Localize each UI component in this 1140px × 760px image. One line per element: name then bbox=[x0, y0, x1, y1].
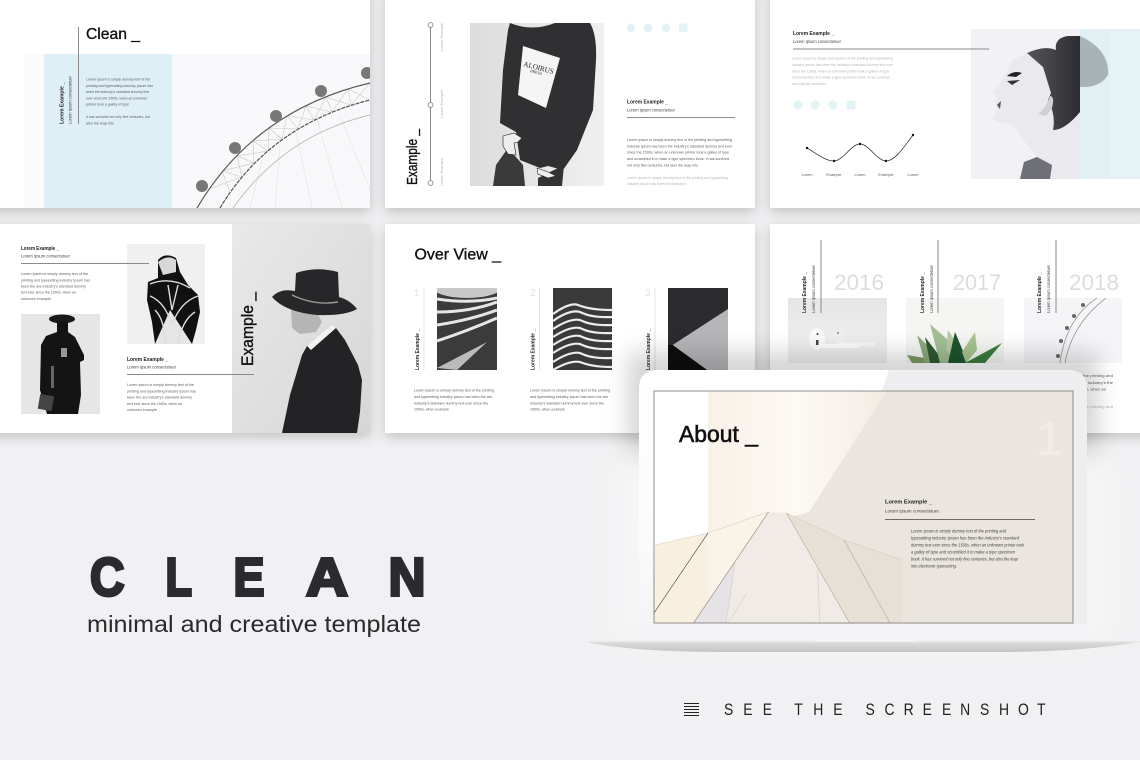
photo: sweater: ALOIRUS bbox=[522, 59, 555, 76]
column 1: Lorem Ipsum is simply dummy text of the printing bbox=[414, 388, 494, 392]
text block: top: Lorem Ipsum consectetuer bbox=[21, 254, 71, 258]
title: CLEAN: L bbox=[166, 548, 192, 608]
photo: profile portrait bbox=[971, 29, 1140, 179]
title: CLEAN: N bbox=[388, 548, 426, 608]
panel: slide Clean with ferris wheel bbox=[0, 0, 373, 208]
panel: slide Clean with ferris wheel: Lorem Example _ bbox=[60, 82, 66, 124]
title: CLEAN: C bbox=[90, 548, 124, 608]
column 2018 bbox=[1024, 240, 1122, 363]
line chart: Lorem bbox=[801, 172, 813, 177]
column 2016: Lorem Ipsum consectetuer bbox=[811, 265, 816, 313]
icon: earbuds bbox=[809, 328, 875, 350]
laptop screen bbox=[654, 391, 1073, 623]
heading: About _ bbox=[679, 421, 759, 447]
panel: slide Clean with ferris wheel: Lorem Ipsum is simply dummy text of the bbox=[86, 76, 151, 82]
laptop glow bbox=[612, 460, 1114, 640]
text block: since the 1500s, when an unknown printer took a galley of type bbox=[627, 150, 729, 154]
column 2016: 2016 bbox=[834, 270, 884, 295]
laptop mockup bbox=[588, 370, 1140, 652]
text block: Lorem Ipsum consectetuer. bbox=[885, 508, 940, 514]
text block: typesetting industry Ipsum has been the industry's standard bbox=[911, 536, 1020, 540]
text block bbox=[1070, 373, 1113, 409]
photo: patterned top bbox=[127, 244, 205, 344]
photo: sweater bbox=[470, 23, 604, 186]
column 1 bbox=[414, 288, 497, 412]
column 2016: Lorem Example _ bbox=[802, 272, 808, 313]
text block: Lorem Ipsum is simply dummy text of the printing and typesetting bbox=[627, 137, 732, 142]
text block: bottom: Lorem Ipsum is simply dummy text of the bbox=[127, 382, 194, 387]
panel: slide profile portrait with line chart bbox=[770, 0, 1140, 208]
column 2: Lorem Example _ bbox=[530, 329, 536, 370]
man with hat bbox=[272, 269, 362, 433]
panel: slide years bbox=[770, 224, 1140, 433]
text block: industry Ipsum has been the industry's standard dummy text ever bbox=[792, 62, 894, 67]
column 3 bbox=[645, 288, 728, 370]
text block: industry Ipsum has been the industry's bbox=[627, 181, 686, 186]
laptop body bbox=[639, 370, 1087, 642]
timeline bbox=[428, 23, 444, 186]
vertical heading: Example _ bbox=[405, 128, 421, 185]
text block: top: printing and typesetting industry Ipsum has bbox=[21, 278, 90, 282]
text block: and scrambled it to make a type specimen book. It has survived bbox=[627, 156, 729, 161]
text block: been the industry's the bbox=[1070, 380, 1113, 385]
laptop screen: 1 bbox=[1036, 413, 1063, 466]
column 1: Lorem Example _ bbox=[415, 329, 421, 370]
column 2018: Lorem Ipsum consectetuer bbox=[1046, 265, 1051, 313]
line chart: Example bbox=[826, 172, 842, 177]
photo: man in coat bbox=[21, 314, 100, 414]
text block bbox=[792, 31, 894, 86]
text block: bottom: Lorem Ipsum consectetuer bbox=[127, 364, 177, 370]
icon: ferris wheel bbox=[1056, 298, 1106, 363]
text block: Lorem Ipsum consectetuer bbox=[627, 108, 675, 112]
text block: bottom: unknown example bbox=[127, 407, 157, 412]
text block: since the 1500s, when an unknown printer took a galley of type bbox=[792, 68, 889, 74]
text block: Lorem Ipsum is simply dummy text of the printing and typesetting bbox=[627, 175, 728, 180]
column 2: 1500s, when example bbox=[530, 406, 565, 412]
photo: sweater: PRESS bbox=[530, 68, 543, 76]
panel: slide Clean with ferris wheel: Lorem Ipsum consectetuer bbox=[68, 76, 72, 124]
text block: bottom: Lorem Example _ bbox=[127, 357, 168, 363]
text block: the 1500s, when an bbox=[1070, 386, 1106, 392]
column 2: industry's standard dummy text ever since the bbox=[530, 400, 604, 406]
column 1: and typesetting industry Ipsum has been the are bbox=[414, 394, 492, 399]
laptop shadow bbox=[628, 352, 1098, 452]
icon: hamburger menu bbox=[684, 704, 699, 716]
text block: a galley of type and scrambled it to make a type specimen bbox=[911, 550, 1016, 554]
text block: top: been the are industry's standard dummy bbox=[21, 284, 86, 288]
column 2: and typesetting industry Ipsum has been the are bbox=[530, 394, 608, 399]
timeline: Lorem Example bbox=[439, 23, 444, 51]
text block bbox=[885, 500, 1035, 568]
column 3: Lorem Example _ bbox=[646, 329, 652, 370]
title: CLEAN: A bbox=[306, 548, 348, 608]
text block: book. It has survived not only five centuries, but also the leap bbox=[911, 556, 1019, 562]
panel: slide Clean with ferris wheel: been the industry's standard dummy text bbox=[86, 89, 150, 94]
text block: and scrambled it to make a type specimen book. It has survived bbox=[792, 74, 890, 80]
column 2018: 2018 bbox=[1069, 270, 1119, 295]
icon: agave plant bbox=[907, 324, 1002, 363]
column 1: 1500s, when example bbox=[414, 406, 449, 412]
text block bbox=[627, 100, 735, 186]
panel: slide Clean with ferris wheel: Clean _ bbox=[86, 26, 140, 43]
title: CLEAN bbox=[90, 548, 426, 608]
panel: slide Example with sweater photo bbox=[385, 0, 755, 208]
text block: top: Lorem Ipsum is simply dummy text of the bbox=[21, 271, 88, 276]
panel: slide Clean with ferris wheel: ever since the 1500s, when an unknown bbox=[86, 96, 147, 100]
text block: Lorem Example _ bbox=[627, 100, 668, 106]
laptop base bbox=[588, 640, 1140, 652]
text block: Lorem Ipsum is simply dummy text of the printing and typesetting bbox=[792, 56, 893, 60]
panel: slide Clean with ferris wheel: printer took a galley of type bbox=[85, 102, 130, 106]
social icons bbox=[627, 23, 688, 32]
text block: text of the printing and bbox=[1070, 404, 1113, 409]
text block: top: Lorem Example _ bbox=[21, 246, 59, 252]
column 2016 bbox=[788, 240, 887, 363]
column 2: Lorem Ipsum is simply dummy text of the printing bbox=[530, 388, 610, 392]
text block: industry Ipsum has been the industry's standard dummy text ever bbox=[627, 144, 733, 148]
text block: Lorem Example _ bbox=[885, 500, 933, 506]
line chart bbox=[801, 134, 919, 177]
column 2017: 2017 bbox=[953, 270, 1001, 295]
social icons bbox=[794, 100, 856, 110]
panel: slide Over View bbox=[385, 224, 755, 433]
text block: dummy text ever since the 1500s, when an unknown printer took bbox=[911, 542, 1025, 548]
panel: slide Clean with ferris wheel: also the leap into bbox=[86, 120, 115, 126]
call to action text: SEE THE SCREENSHOT bbox=[724, 701, 1046, 719]
title: CLEAN: E bbox=[234, 548, 264, 608]
text block: bottom: been the are industry's standard dummy bbox=[127, 394, 192, 400]
column 2017: Lorem Ipsum consectetuer bbox=[929, 265, 934, 313]
column 3: 3 bbox=[645, 288, 651, 299]
line chart: Lorem bbox=[854, 172, 866, 177]
text block: not only five centuries bbox=[792, 81, 826, 86]
column 2017: Lorem Example _ bbox=[920, 272, 926, 313]
text block: Lorem Ipsum is simply dummy text of the printing and bbox=[911, 528, 1007, 534]
column 2018: Lorem Example _ bbox=[1037, 272, 1043, 313]
column 1: 1 bbox=[414, 288, 420, 299]
timeline: Lorem Example bbox=[439, 90, 444, 118]
text block: bottom: text ever since the 1500s, when an bbox=[127, 401, 182, 406]
text block: Lorem Example _ bbox=[793, 31, 834, 37]
heading: Over View _ bbox=[414, 246, 501, 264]
panel: slide Clean with ferris wheel: It has survived not only five centuries, but bbox=[86, 114, 151, 119]
text block: bottom: printing and typesetting industry Ipsum has bbox=[127, 388, 196, 394]
column 1: industry's standard dummy text ever since the bbox=[414, 400, 488, 406]
text block: into electronic typesetting. bbox=[911, 564, 957, 568]
line chart: Example bbox=[878, 172, 894, 177]
panel: slide Clean with ferris wheel: printing and typesetting industry Ipsum has bbox=[85, 83, 153, 88]
subtitle: minimal and creative template bbox=[87, 611, 421, 637]
text block: top: text ever since the 1500s, when an bbox=[21, 290, 76, 294]
timeline: Lorem Example bbox=[439, 158, 444, 186]
text block: bottom bbox=[127, 357, 196, 412]
column 2 bbox=[530, 288, 612, 412]
text block: top: unknown example bbox=[21, 296, 51, 301]
text block: text of the printing and bbox=[1070, 373, 1113, 378]
text block: Lorem Ipsum consectetuer bbox=[793, 39, 841, 44]
text block: not only five centuries, but also the leap into bbox=[627, 162, 698, 168]
line chart: Lorem bbox=[907, 172, 919, 177]
text block: top bbox=[21, 246, 90, 301]
panel: slide Example with hat bbox=[0, 224, 370, 433]
column 2: 2 bbox=[530, 288, 536, 299]
ferris wheel bbox=[196, 67, 373, 208]
column 2017 bbox=[906, 240, 1004, 363]
vertical heading: Example _ bbox=[238, 292, 257, 366]
